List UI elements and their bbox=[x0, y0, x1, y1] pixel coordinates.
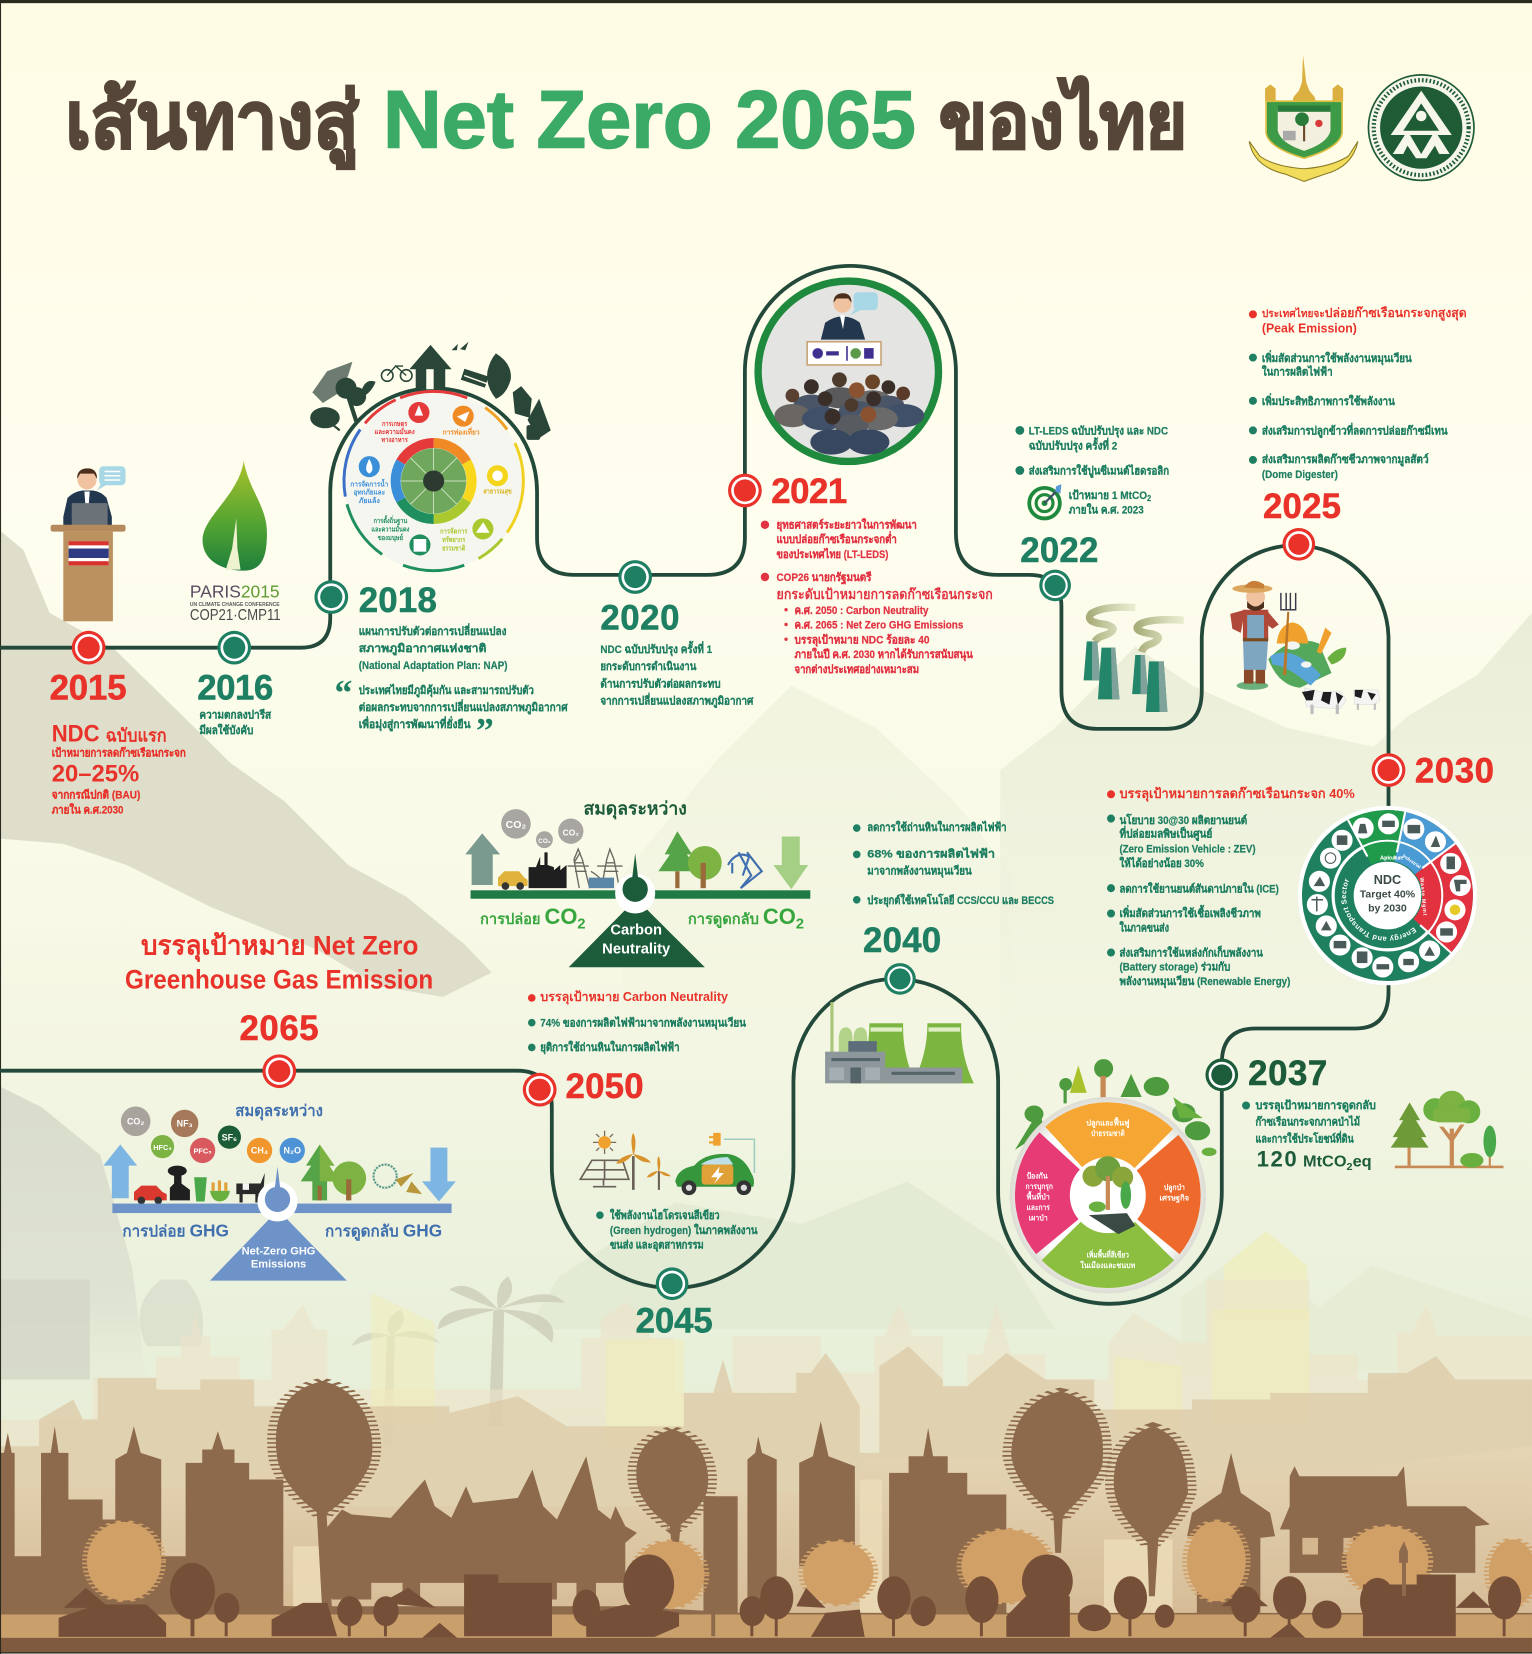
chart: forest wheel: เศรษฐกิจ bbox=[1160, 1193, 1189, 1203]
labels bbox=[480, 904, 804, 958]
text: 2040 bullets: 68% ของการผลิตไฟฟ้า bbox=[867, 847, 995, 861]
icon: GHG sources bbox=[134, 1166, 265, 1204]
text: 2030 bullets: พลังงานหมุนเวียน (Renewable Energy) bbox=[1119, 975, 1291, 989]
chart: forest wheel: เผาป่า bbox=[1029, 1213, 1048, 1222]
text: 2037: 120 bbox=[1257, 1147, 1297, 1172]
icon: farmer, farm and cows bbox=[1230, 581, 1380, 714]
text: 2025 bullets: ประเทศไทยจะปล่อยก๊าซเรือนกระจกสูงสุด bbox=[1262, 306, 1467, 321]
text: 2020: NDC ฉบับปรับปรุง ครั้งที่ 1 bbox=[600, 640, 712, 657]
labels: 2 bbox=[796, 916, 804, 932]
arrow: GHG absorption down bbox=[422, 1148, 456, 1201]
marker 2020 bbox=[618, 560, 652, 594]
chart: NDC target wheel: NDC bbox=[1374, 873, 1401, 887]
marker 2030 bbox=[1372, 753, 1405, 787]
chart: forest wheel: ในเมืองและชนบท bbox=[1080, 1260, 1135, 1270]
chart: adaptation wheel: การตั้งถิ่นฐาน bbox=[374, 514, 407, 526]
text: 2022 bullets: เป้าหมาย 1 MtCO bbox=[1069, 490, 1155, 502]
chart: NDC target wheel: Target 40% bbox=[1360, 889, 1416, 901]
year 2022: 2022 bbox=[1020, 531, 1098, 570]
icon: GHG bubbles: PFC₅ bbox=[194, 1147, 212, 1156]
title: ของไทย bbox=[939, 76, 1187, 165]
panel: 2037 bbox=[1010, 1054, 1504, 1293]
text: 2020: ยกระดับการดำเนินงาน bbox=[600, 660, 697, 673]
chart: forest wheel bbox=[1010, 1059, 1217, 1293]
text: 2021 bullets: จากต่างประเทศอย่างเหมาะสม bbox=[794, 663, 919, 676]
palm trees bbox=[276, 1381, 1188, 1546]
icon: absorption sources bbox=[658, 831, 762, 888]
text: 2040 bullets: ลดการใช้ถ่านหินในการผลิตไฟฟ้า bbox=[867, 820, 1007, 834]
text: 2040 bullets: ประยุกต์ใช้เทคโนโลยี CCS/CCU และ BECCS bbox=[867, 893, 1054, 908]
road bbox=[0, 1638, 1532, 1652]
balance pivot bbox=[615, 853, 655, 913]
pivot GHG bbox=[257, 1167, 298, 1222]
text: 2050 bullets: บรรลุเป้าหมาย Carbon Neutrality bbox=[540, 990, 728, 1005]
text: 2021 bullets bbox=[761, 517, 993, 676]
heading: net zero: บรรลุเป้าหมาย Net Zero bbox=[141, 931, 418, 963]
text: 2018: แผนการปรับตัวต่อการเปลี่ยนแปลง bbox=[359, 623, 506, 638]
year 2020: 2020 bbox=[600, 599, 679, 638]
chart: adaptation wheel: และความมั่นคง bbox=[371, 524, 410, 534]
text: 2022 bullets: ส่งเสริมการใช้ปูนซีเมนต์ไฮดรอลิก bbox=[1029, 464, 1169, 479]
text: 2015 NDC bbox=[52, 721, 186, 816]
labels: การปล่อย CO bbox=[480, 904, 578, 929]
heading: balance: สมดุลระหว่าง bbox=[583, 798, 687, 819]
chart: adaptation wheel: การท่องเที่ยว bbox=[443, 427, 480, 437]
text: 2030 bullets: บรรลุเป้าหมายการลดก๊าซเรือนกระจก 40% bbox=[1119, 786, 1355, 802]
text: 2045 bbox=[596, 1208, 758, 1252]
year 2065: 2065 bbox=[240, 1009, 319, 1048]
text: 2025 bullets bbox=[1249, 306, 1467, 481]
text: 2030 bullets: ในภาคขนส่ง bbox=[1119, 920, 1169, 934]
chart: NDC target wheel: by 2030 bbox=[1368, 902, 1407, 914]
labels: 2 bbox=[577, 916, 586, 932]
icon: GHG bubbles: N₂O bbox=[284, 1146, 301, 1156]
icon: CO2 bubbles: CO₂ bbox=[506, 819, 526, 831]
city skyline bbox=[0, 1276, 1532, 1654]
year 2037: 2037 bbox=[1248, 1054, 1327, 1093]
text: 2018: เพื่อมุ่งสู่การพัฒนาที่ยั่งยืน bbox=[359, 716, 471, 732]
marker 2016 bbox=[217, 631, 251, 665]
text: 2025 bullets: เพิ่มสัดส่วนการใช้พลังงานหมุนเวียน bbox=[1262, 350, 1412, 366]
text: 2030 bullets: (Zero Emission Vehicle : ZEV) bbox=[1119, 843, 1256, 855]
labels GHG: Emissions bbox=[251, 1258, 306, 1270]
mid buildings bbox=[0, 1346, 1532, 1654]
base tan bbox=[0, 1446, 1532, 1654]
text: 2025 bullets: เพิ่มประสิทธิภาพการใช้พลังงาน bbox=[1262, 393, 1395, 408]
marker 2022 bbox=[1039, 570, 1071, 601]
icon: emission sources bbox=[498, 849, 623, 890]
chart: NDC target wheel: Industrial bbox=[1401, 853, 1422, 870]
text: 2018: ” bbox=[476, 711, 494, 751]
chart: adaptation wheel: การจัดการ bbox=[440, 527, 468, 536]
text: 2018: ต่อผลกระทบจากการเปลี่ยนแปลงสภาพภูมิอากาศ bbox=[359, 699, 569, 715]
text: 2030 bullets: นโยบาย 30@30 ผลิตยานยนต์ bbox=[1119, 813, 1247, 827]
dark foreground trees and cars bbox=[59, 1555, 1521, 1638]
text: 2021 bullets: COP26 นายกรัฐมนตรี bbox=[777, 571, 872, 585]
chart: NDC target wheel bbox=[1298, 806, 1477, 986]
timeline path bbox=[0, 266, 1389, 1304]
icon: GHG sinks bbox=[301, 1145, 422, 1200]
text: 2037: 2 bbox=[1347, 1161, 1353, 1173]
icon: CO2 bubbles: CO₂ bbox=[538, 838, 551, 845]
text: 2020: ด้านการปรับตัวต่อผลกระทบ bbox=[600, 678, 721, 691]
year 2021: 2021 bbox=[771, 472, 847, 511]
chart: NDC target wheel: Agriculture bbox=[1380, 856, 1403, 862]
text: 2022 bullets: ฉบับปรับปรุง ครั้งที่ 2 bbox=[1029, 436, 1117, 453]
icon: Paris 2015 logo: COP21·CMP11 bbox=[190, 607, 281, 624]
chart: NDC target wheel: Energy and Transport Sector bbox=[1341, 878, 1416, 941]
year 2050: 2050 bbox=[566, 1067, 644, 1106]
heading: balance GHG: สมดุลระหว่าง bbox=[235, 1103, 323, 1121]
icon: Paris 2015 logo: PARIS2015 bbox=[190, 582, 280, 602]
icon: CO2 bubbles bbox=[501, 809, 583, 848]
labels GHG: การปล่อย GHG bbox=[122, 1220, 229, 1240]
chart: forest wheel: ป้องกัน bbox=[1027, 1170, 1048, 1180]
text: 2037: และการใช้ประโยชน์ที่ดิน bbox=[1256, 1130, 1354, 1145]
text: 2037 bbox=[1242, 1099, 1376, 1173]
text: 2037: ก๊าซเรือนกระจกภาคป่าไม้ bbox=[1256, 1115, 1360, 1129]
text: 2030 bullets: ส่งเสริมการใช้แหล่งกักเก็บพลังงาน bbox=[1119, 946, 1263, 960]
title bbox=[65, 75, 1187, 170]
triangle base GHG bbox=[210, 1210, 347, 1281]
chart: adaptation wheel: ทางอาหาร bbox=[381, 436, 408, 444]
icon: Paris 2015 logo bbox=[190, 461, 281, 624]
text: 2021 bullets: บรรลุเป้าหมาย NDC ร้อยละ 40 bbox=[794, 633, 930, 647]
text: 2030 bullets: (Battery storage) ร่วมกับ bbox=[1119, 960, 1230, 973]
text: 2045: ใช้พลังงานไฮโดรเจนสีเขียว bbox=[610, 1208, 720, 1222]
balance beam bbox=[471, 890, 810, 899]
chart: adaptation wheel: การจัดการน้ำ bbox=[350, 477, 388, 488]
icon: smoking chimneys bbox=[1084, 607, 1184, 712]
icon: CO2 bubbles: CO₂ bbox=[563, 827, 579, 837]
title: Net Zero 2065 bbox=[383, 75, 916, 166]
chart: forest wheel: และการ bbox=[1027, 1203, 1050, 1212]
text: 2025 bullets: (Dome Digester) bbox=[1262, 469, 1338, 481]
text: 2022 bullets bbox=[1015, 425, 1169, 517]
orange trees bbox=[87, 1521, 1532, 1608]
front buildings bbox=[0, 1426, 283, 1615]
arrow: GHG emission up bbox=[103, 1145, 137, 1198]
marker 2045 bbox=[656, 1267, 688, 1300]
triangle base bbox=[569, 899, 705, 967]
text: 2015 NDC: จากกรณีปกติ (BAU) bbox=[52, 789, 141, 802]
chart: adaptation wheel: อุทกภัยและ bbox=[353, 488, 385, 497]
text: 2025 bullets: ส่งเสริมการปลูกข้าวที่ลดการปล่อยก๊าซมีเทน bbox=[1262, 423, 1448, 439]
labels: Neutrality bbox=[602, 942, 671, 958]
text: 2018 bbox=[334, 623, 569, 751]
chart: forest wheel: ป่าธรรมชาติ bbox=[1091, 1129, 1125, 1138]
pale background block and palms bbox=[0, 1280, 203, 1380]
logo: department seal bbox=[1368, 75, 1474, 180]
icon: GHG bubbles: NF₃ bbox=[177, 1119, 193, 1129]
text: 2030 bullets: ลดการใช้ยานยนต์สันดาปภายใน (ICE) bbox=[1119, 881, 1279, 895]
marker 2018 bbox=[314, 580, 348, 614]
text: 2045: (Green hydrogen) ในภาคพลังงาน bbox=[610, 1223, 758, 1237]
panel: 2030 bbox=[1107, 752, 1494, 989]
marker 2065 bbox=[262, 1054, 296, 1088]
panel: 2040 bbox=[825, 820, 1054, 1083]
chart: forest wheel: ปลูกและฟื้นฟู bbox=[1086, 1117, 1130, 1129]
text: 2030 bullets: ที่ปล่อยมลพิษเป็นศูนย์ bbox=[1119, 826, 1212, 842]
text: 2025 bullets: ส่งเสริมการผลิตก๊าซชีวภาพจากมูลสัตว์ bbox=[1262, 453, 1429, 467]
text: 2018: สภาพภูมิอากาศแห่งชาติ bbox=[359, 642, 486, 656]
text: 2018: (National Adaptation Plan: NAP) bbox=[359, 660, 508, 672]
rain cloud bbox=[312, 362, 352, 403]
text: 2021 bullets: ยกระดับเป้าหมายการลดก๊าซเรือนกระจก bbox=[777, 586, 993, 602]
text: 2016: ความตกลงปารีส bbox=[199, 708, 271, 721]
icon: power plant bbox=[825, 1002, 974, 1083]
text: 2018: ประเทศไทยมีภูมิคุ้มกัน และสามารถปรับตัว bbox=[359, 683, 534, 698]
text: 2015 NDC: NDC ฉบับแรก bbox=[52, 721, 167, 748]
marker 2040 bbox=[884, 963, 916, 995]
chart: forest wheel: พื้นที่ป่า bbox=[1027, 1190, 1050, 1201]
labels GHG bbox=[122, 1220, 442, 1270]
text: 2021 bullets: ยุทธศาสตร์ระยะยาวในการพัฒนา bbox=[777, 517, 917, 532]
panel: 2025 bbox=[1230, 306, 1467, 714]
year 2018: 2018 bbox=[359, 581, 437, 620]
year 2025: 2025 bbox=[1263, 487, 1341, 526]
chart: forest wheel: ปลูกป่า bbox=[1164, 1183, 1185, 1193]
text: 2021 bullets: แบบปล่อยก๊าซเรือนกระจกต่ำ bbox=[777, 531, 897, 546]
text: 2016 bbox=[199, 708, 271, 737]
text: 2015 NDC: 20–25% bbox=[52, 761, 139, 788]
text: 2030 bullets bbox=[1107, 786, 1355, 989]
text: 2020: จากการเปลี่ยนแปลงสภาพภูมิอากาศ bbox=[600, 693, 754, 709]
heading: net zero: Greenhouse Gas Emission bbox=[125, 964, 433, 994]
year 2030: 2030 bbox=[1415, 752, 1494, 791]
icon: GHG bubbles bbox=[121, 1107, 305, 1163]
chart: forest wheel: การบุกรุก bbox=[1026, 1182, 1053, 1192]
text: 2016: มีผลใช้บังคับ bbox=[199, 723, 253, 737]
chart: adaptation wheel: ของมนุษย์ bbox=[378, 533, 403, 542]
panel: carbon neutrality balance bbox=[465, 798, 810, 967]
year 2045: 2045 bbox=[636, 1301, 713, 1340]
icon: COP26 speaker and audience bbox=[758, 281, 939, 461]
text: 2022 bullets: ภายใน ค.ศ. 2023 bbox=[1069, 503, 1144, 517]
labels GHG: Net-Zero GHG bbox=[242, 1246, 315, 1258]
icon: trees bbox=[1391, 1091, 1504, 1168]
chart: adaptation wheel: การเกษตร bbox=[382, 420, 407, 428]
text: 2021 bullets: ค.ศ. 2050 : Carbon Neutrality bbox=[794, 605, 929, 617]
text: 2021 bullets: ภายในปี ค.ศ. 2030 หากได้รับการสนับสนุน bbox=[794, 647, 973, 662]
text: 2021 bullets: ค.ศ. 2065 : Net Zero GHG Emissions bbox=[794, 620, 963, 632]
chart: adaptation wheel: ทรัพยากร bbox=[442, 535, 465, 544]
text: 2025 bullets: (Peak Emission) bbox=[1262, 321, 1357, 335]
arrow: emission up bbox=[465, 833, 500, 885]
chart: adaptation wheel bbox=[344, 391, 523, 571]
panel: 2016 bbox=[190, 461, 281, 737]
ground bbox=[0, 1615, 1532, 1639]
chart: adaptation wheel: และความมั่นคง bbox=[375, 426, 415, 436]
heading: net zero bbox=[125, 931, 433, 994]
title: เส้นทางสู่ bbox=[65, 77, 359, 170]
icon: target bbox=[1029, 484, 1061, 518]
text: 2020 bbox=[600, 640, 754, 709]
far buildings bbox=[0, 1280, 1532, 1654]
year 2040: 2040 bbox=[863, 921, 941, 960]
chart: forest wheel: เพิ่มพื้นที่สีเขียว bbox=[1087, 1248, 1129, 1259]
panel: 2018 national adaptation plan bbox=[310, 342, 569, 751]
balance beam GHG bbox=[112, 1204, 452, 1213]
icon: GHG bubbles: SF₆ bbox=[222, 1132, 237, 1142]
text: 2030 bullets: เพิ่มสัดส่วนการใช้เชื้อเพลิงชีวภาพ bbox=[1119, 904, 1261, 920]
icon: Paris 2015 logo: UN CLIMATE CHANGE CONFERENCE bbox=[190, 602, 280, 608]
panel: 2050 bbox=[523, 990, 758, 1340]
marker 2037 bbox=[1205, 1059, 1238, 1091]
arrow: absorption down bbox=[773, 836, 808, 889]
text: 2037: บรรลุเป้าหมายการดูดกลับ bbox=[1256, 1099, 1376, 1113]
text: 2015 NDC: ภายใน ค.ศ.2030 bbox=[52, 802, 123, 816]
chart: adaptation wheel: ภัยแล้ง bbox=[359, 496, 380, 505]
labels: Carbon bbox=[610, 923, 662, 939]
year 2016: 2016 bbox=[197, 668, 273, 707]
labels: การดูดกลับ CO bbox=[688, 904, 796, 929]
pale palm bbox=[352, 1276, 565, 1446]
panel: 2020 bbox=[600, 560, 754, 709]
text: 2040 bullets: มาจากพลังงานหมุนเวียน bbox=[867, 864, 972, 878]
text: 2045: ขนส่ง และอุตสาหกรรม bbox=[610, 1239, 704, 1252]
marker 2050 bbox=[523, 1073, 557, 1107]
text: 2025 bullets: ในการผลิตไฟฟ้า bbox=[1262, 365, 1333, 379]
lamp posts bbox=[258, 1541, 1408, 1636]
chart: NDC target wheel: Waste Mgmt bbox=[1418, 877, 1427, 916]
text: 2050 bullets: 74% ของการผลิตไฟฟ้ามาจากพลังงานหมุนเวียน bbox=[540, 1015, 746, 1030]
panel: 2065 net zero bbox=[103, 931, 456, 1281]
text: 2030 bullets: ให้ได้อย่างน้อย 30% bbox=[1119, 856, 1204, 870]
icon: renewable energy and EV bbox=[580, 1131, 754, 1195]
icon: speaker at podium bbox=[51, 466, 126, 621]
text: 2037: MtCO bbox=[1303, 1154, 1345, 1171]
labels GHG: การดูดกลับ GHG bbox=[325, 1220, 442, 1242]
text: 2015 NDC: เป้าหมายการลดก๊าซเรือนกระจก bbox=[52, 746, 186, 759]
text: 2022 bullets: 2 bbox=[1147, 494, 1152, 503]
marker 2015 bbox=[72, 631, 106, 665]
text: 2021 bullets: ของประเทศไทย (LT-LEDS) bbox=[777, 547, 889, 561]
logo: ministry crest bbox=[1249, 55, 1358, 181]
icon: GHG bubbles: CH₄ bbox=[251, 1146, 268, 1156]
panel: 2021 bbox=[728, 281, 993, 676]
icon: eco silhouette bbox=[310, 342, 551, 440]
text: 2022 bullets: LT-LEDS ฉบับปรับปรุง และ NDC bbox=[1029, 425, 1168, 439]
marker 2021 bbox=[728, 474, 762, 507]
year 2015: 2015 bbox=[50, 668, 127, 707]
chart: adaptation wheel: สาธารณสุข bbox=[483, 488, 512, 496]
text: 2037: eq bbox=[1353, 1154, 1372, 1171]
text: 2018: “ bbox=[334, 673, 352, 713]
marker 2025 bbox=[1282, 528, 1315, 561]
panel: 2022 bbox=[1015, 425, 1184, 712]
yellow pale towers bbox=[371, 1293, 1309, 1446]
icon: GHG bubbles: CO₂ bbox=[127, 1116, 144, 1126]
text: 2050 bullets bbox=[528, 990, 746, 1055]
text: 2040 bullets bbox=[853, 820, 1054, 908]
icon: GHG bubbles: HFC₅ bbox=[153, 1143, 172, 1152]
text: 2050 bullets: ยุติการใช้ถ่านหินในการผลิตไฟฟ้า bbox=[540, 1040, 679, 1055]
chart: adaptation wheel: ธรรมชาติ bbox=[442, 544, 466, 553]
panel: 2015 bbox=[50, 466, 186, 816]
